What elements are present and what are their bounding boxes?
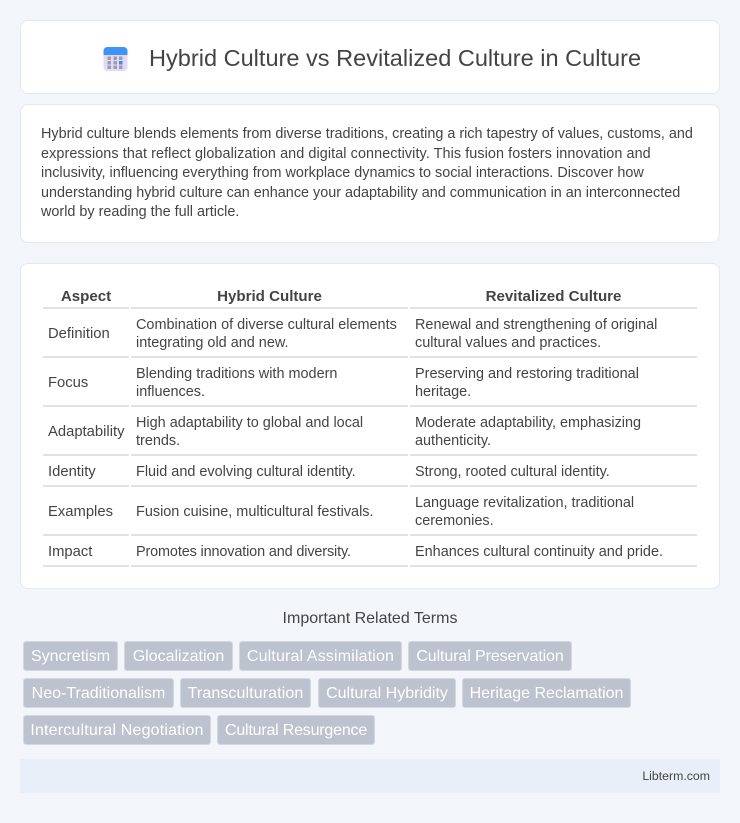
row: examples: Examples [48,504,113,520]
row: adaptability: High adaptability to global and local [136,415,363,431]
table headers: Hybrid Culture [217,288,322,305]
panel: comparison table [20,263,720,589]
row: definition: cultural values and practices. [415,335,601,351]
row: focus: Blending traditions with modern [136,366,337,382]
row: focus: heritage. [415,384,471,400]
footer credit: Libterm.com [642,769,710,783]
intro paragraph: inclusivity, influencing everything from workplace dynamics to social interactions. Discover how [41,165,644,181]
related term tags: Neo-Traditionalism [32,685,165,702]
row: adaptability: Moderate adaptability, emphasizing [415,415,641,431]
intro paragraph: understanding hybrid culture can enhance your adaptability and communication in an interconnected [41,184,680,200]
row: definition: integrating old and new. [136,335,289,351]
row: identity: Fluid and evolving cultural identity. [136,464,356,480]
icon: calendar [104,47,128,71]
row: impact: Promotes innovation and diversity. [136,544,351,560]
row: examples: Language revitalization, traditional [415,495,634,511]
intro paragraph: world by reading the full article. [41,204,239,220]
row: examples [48,495,634,529]
related term tags: Glocalization [133,648,224,665]
row: definition: Renewal and strengthening of original [415,317,657,333]
footer [20,759,720,793]
row: identity: Identity [48,464,96,480]
row: examples: Fusion cuisine, multicultural festivals. [136,504,374,520]
related term tags: Cultural Hybridity [326,685,448,702]
related term tags: Cultural Resurgence [225,722,367,739]
title: Hybrid Culture vs Revitalized Culture in Culture [149,45,641,71]
row: definition: Definition [48,326,110,342]
row: focus: influences. [136,384,205,400]
related term tags: Cultural Preservation [416,648,564,665]
row: definition [48,317,657,351]
row: impact: Enhances cultural continuity and pride. [415,544,663,560]
row: impact: Impact [48,544,92,560]
table headers [61,288,621,305]
related term tags: Transculturation [188,685,303,702]
row: adaptability: Adaptability [48,424,124,440]
intro paragraph [41,126,693,220]
table headers: Revitalized Culture [486,288,621,305]
row: impact [48,544,663,560]
row: identity [48,464,610,480]
row: definition: Combination of diverse cultural elements [136,317,397,333]
related term tags: Heritage Reclamation [470,685,623,702]
related term tags [23,641,631,745]
panel: intro text [20,104,720,243]
heading: related terms: Important Related Terms [283,610,457,627]
related term tags: Intercultural Negotiation [30,722,204,739]
related term tags: Cultural Assimilation [247,648,394,665]
intro paragraph: expressions that reflect globalization and digital connectivity. This fusion fosters innovation and [41,146,651,162]
related term tags: Syncretism [31,648,110,665]
intro paragraph: Hybrid culture blends elements from diverse traditions, creating a rich tapestry of values, customs, and [41,126,693,142]
row: focus: Preserving and restoring traditional [415,366,639,382]
row: adaptability: authenticity. [415,433,491,449]
table headers: Aspect [61,288,111,305]
panel: header [20,20,720,94]
row: adaptability: trends. [136,433,180,449]
row: focus: Focus [48,375,88,391]
row: identity: Strong, rooted cultural identity. [415,464,610,480]
row: examples: ceremonies. [415,513,494,529]
row: adaptability [48,415,641,449]
row: focus [48,366,639,400]
